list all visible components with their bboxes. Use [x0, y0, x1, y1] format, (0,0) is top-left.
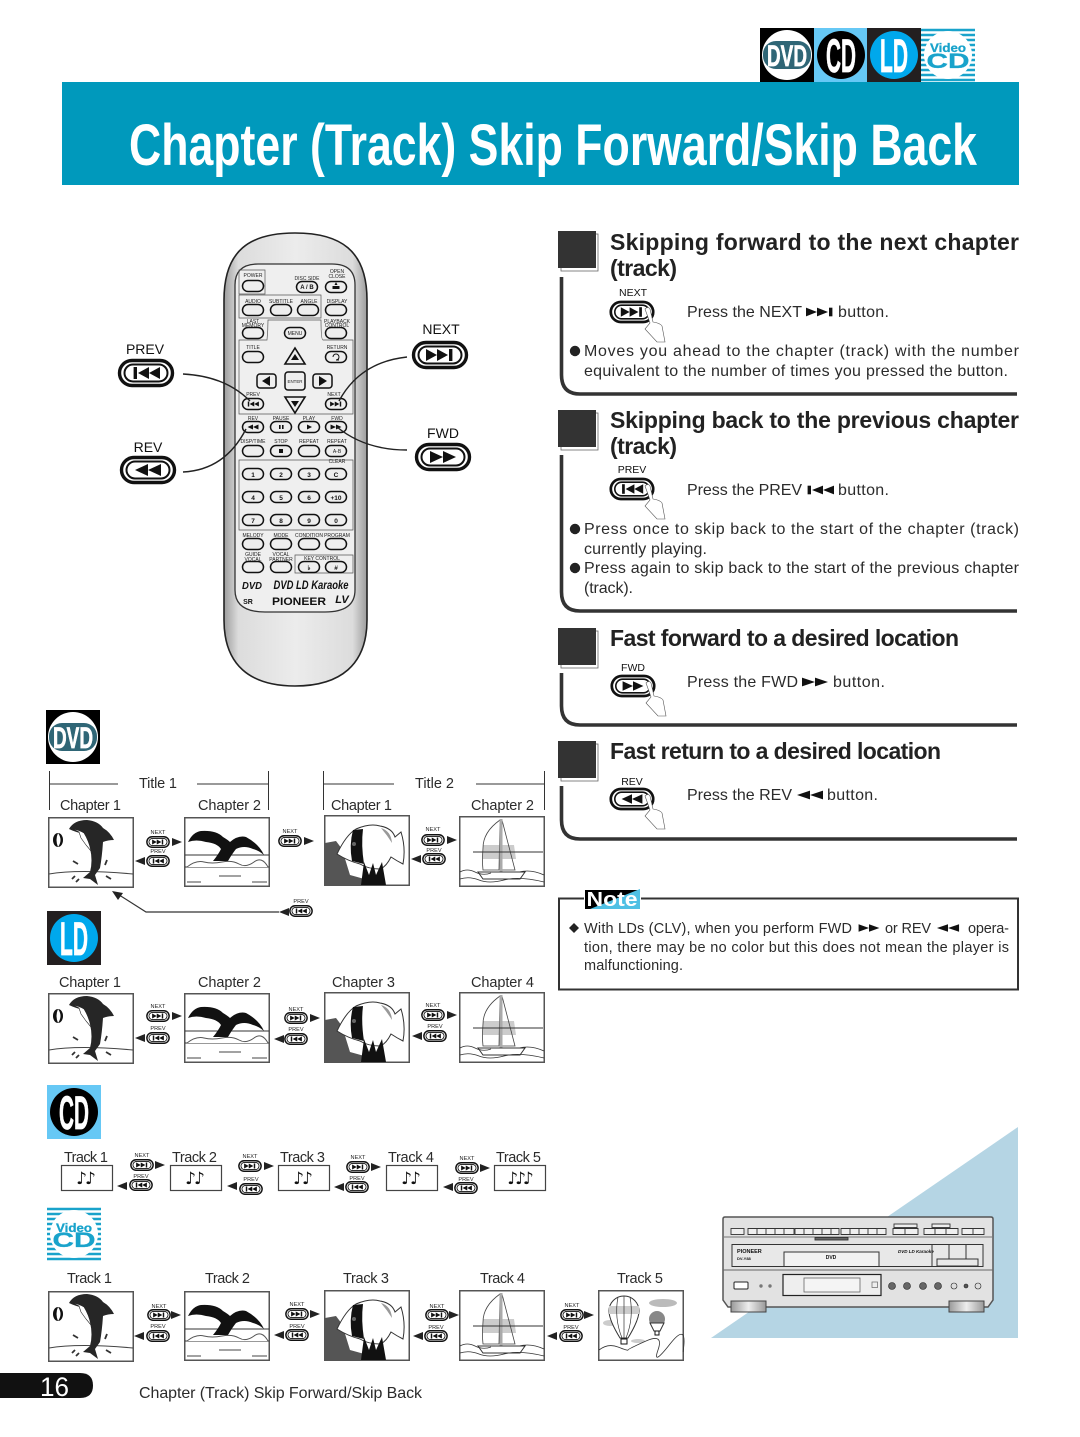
instruction	[687, 304, 889, 321]
remote labels: CONDITION	[295, 533, 323, 539]
labels	[60, 776, 534, 814]
labels: Track 1	[67, 1271, 112, 1287]
remote labels: STOP	[274, 439, 288, 445]
remote labels: VOCAL	[273, 552, 290, 558]
tray panel	[732, 1244, 983, 1266]
remote labels: 1	[251, 472, 255, 479]
skip buttons: NEXT	[430, 1304, 445, 1310]
skip buttons: PREV	[426, 848, 442, 854]
remote labels: FWD	[331, 416, 343, 422]
remote button glyphs	[248, 282, 341, 453]
section marker	[558, 741, 598, 781]
logo: LD: LD	[60, 912, 88, 965]
instruction	[687, 482, 889, 499]
skip buttons	[135, 1003, 457, 1044]
CD diagram	[47, 1085, 546, 1194]
remote labels: PREV	[246, 392, 260, 398]
skip buttons: PREV	[427, 1024, 443, 1030]
remote labels: NEXT	[327, 392, 341, 398]
remote labels: GUIDE	[245, 552, 262, 558]
skip buttons: NEXT	[151, 830, 166, 836]
skip buttons: PREV	[243, 1177, 259, 1183]
REV button with hand	[611, 776, 665, 829]
remote labels: ENTER	[288, 379, 302, 384]
logo: DVD	[46, 710, 100, 764]
remote labels: C	[334, 472, 339, 479]
skip buttons: NEXT	[152, 1304, 167, 1310]
labels: Track 3	[280, 1150, 325, 1166]
instruction: Press the REV	[687, 787, 792, 804]
remote labels: PLAYBACK	[324, 319, 351, 325]
instruction: button.	[827, 787, 878, 804]
section: fast return	[558, 738, 1017, 839]
callout: PREV button: PREV	[126, 341, 165, 357]
instruction: button.	[833, 674, 885, 691]
note badge: Note	[586, 889, 638, 911]
remote labels: MENU	[288, 331, 303, 337]
logo: CD	[47, 1085, 101, 1139]
skip buttons: PREV	[458, 1177, 474, 1183]
remote labels: OPEN	[330, 269, 344, 275]
remote labels: KEY CONTROL	[304, 556, 340, 562]
note text: opera-	[968, 921, 1009, 937]
remote labels: CLEAR	[329, 459, 346, 465]
music notes: ♪♪♪	[507, 1169, 533, 1189]
labels: Chapter 1	[60, 798, 121, 814]
heading: (track)	[610, 433, 677, 459]
remote labels: DVD LD Karaoke	[274, 578, 349, 592]
NEXT button with hand	[611, 287, 665, 342]
remote labels: ♭	[307, 564, 311, 572]
skip buttons: PREV	[150, 1324, 166, 1330]
skip buttons: PREV	[133, 1174, 149, 1180]
note text: malfunctioning.	[584, 958, 683, 974]
skip buttons: NEXT	[426, 827, 441, 833]
remote labels: 5	[279, 495, 283, 502]
title brackets	[49, 771, 544, 810]
callout: NEXT button: NEXT	[422, 321, 460, 337]
remote labels: PARTNER	[269, 557, 293, 563]
labels: Track 3	[343, 1271, 389, 1287]
heading: (track)	[610, 255, 677, 281]
section: fast forward	[558, 625, 1017, 725]
player branding: PIONEER	[737, 1249, 762, 1255]
skip buttons: NEXT	[290, 1302, 305, 1308]
logo: Video CD	[47, 1207, 101, 1261]
labels	[64, 1150, 541, 1166]
NEXT button with hand: NEXT	[619, 287, 648, 299]
bullet text	[570, 343, 1020, 380]
labels	[67, 1271, 663, 1287]
remote labels: ANGLE	[301, 299, 318, 305]
labels: Track 1	[64, 1150, 108, 1166]
remote labels: PAUSE	[273, 416, 290, 422]
logo: DVD: DVD	[767, 40, 807, 73]
skip buttons	[117, 1153, 490, 1194]
callout: FWD button: FWD	[427, 425, 459, 441]
heading: Fast forward to a desired location	[610, 625, 959, 651]
instruction: Press the NEXT	[687, 304, 802, 321]
labels: Track 2	[172, 1150, 217, 1166]
bullet text: Press again to skip back to the start of the previous chapter	[584, 560, 1020, 577]
note frame	[559, 898, 1018, 990]
remote labels: CONTROL	[325, 323, 349, 329]
labels: Chapter 1	[59, 975, 121, 991]
music notes: ♪♪	[293, 1169, 312, 1189]
remote labels: PROGRAM	[324, 533, 350, 539]
logo: DVD	[760, 28, 814, 82]
heading	[610, 229, 1019, 281]
skip buttons	[135, 827, 457, 866]
remote labels: 0	[334, 518, 338, 525]
logo: Video CD: Video	[56, 1223, 92, 1235]
note text: or REV	[885, 921, 931, 937]
logo: LD: LD	[880, 29, 908, 82]
remote button outlines	[239, 270, 353, 573]
section marker	[558, 231, 598, 271]
skip buttons: PREV	[289, 1324, 305, 1330]
remote labels: SUBTITLE	[269, 299, 294, 305]
skip buttons: PREV	[150, 1026, 166, 1032]
labels: Title 2	[415, 776, 454, 792]
return arrow	[112, 891, 312, 916]
remote labels: PIONEER	[272, 596, 326, 608]
bullet text: equivalent to the number of times you pressed the button.	[584, 363, 1008, 380]
blue triangle backdrop	[711, 1127, 1018, 1338]
return arrow: PREV	[293, 899, 309, 905]
skip buttons: NEXT	[460, 1156, 475, 1162]
instruction: Press the FWD	[687, 674, 798, 691]
skip buttons: NEXT	[426, 1003, 441, 1009]
remote labels: MELODY	[242, 533, 264, 539]
FWD button with hand	[612, 662, 666, 716]
remote labels: CLOSE	[329, 274, 346, 280]
logo: Video CD: Video	[930, 43, 966, 55]
labels: Title 1	[139, 776, 177, 792]
remote labels: DVD	[242, 581, 262, 592]
labels: Track 5	[496, 1150, 541, 1166]
skip buttons: NEXT	[351, 1155, 366, 1161]
title banner	[62, 82, 1019, 185]
labels: Track 4	[388, 1150, 434, 1166]
section rule	[562, 786, 1017, 839]
skip buttons: NEXT	[289, 1007, 304, 1013]
section rule	[562, 277, 1017, 394]
instruction: Press the PREV	[687, 482, 802, 499]
skip buttons: NEXT	[243, 1154, 258, 1160]
labels: Track 2	[205, 1271, 250, 1287]
PREV button with hand	[611, 464, 665, 519]
remote labels: A / B	[300, 285, 314, 291]
bullet text: Press once to skip back to the start of the chapter (track)	[584, 521, 1019, 538]
DVD diagram	[46, 710, 544, 916]
logo: DVD: DVD	[53, 722, 93, 755]
callout: PREV button	[120, 341, 172, 386]
skip buttons: NEXT	[151, 1004, 166, 1010]
skip buttons: NEXT	[135, 1153, 150, 1159]
instruction: button.	[838, 482, 889, 499]
Video CD diagram	[47, 1207, 684, 1361]
remote labels: DISC SIDE	[294, 276, 320, 282]
remote labels	[240, 269, 351, 608]
bullet text: currently playing.	[584, 541, 707, 558]
note text: With LDs (CLV), when you perform FWD	[584, 921, 852, 937]
callout: FWD button	[416, 425, 470, 470]
remote labels: 6	[307, 495, 311, 502]
labels: Chapter 4	[471, 975, 534, 991]
remote control	[224, 233, 367, 686]
labels	[59, 975, 534, 991]
logo: Video CD: CD	[52, 1229, 96, 1252]
remote labels: +10	[330, 495, 342, 502]
logo: Video CD: CD	[926, 50, 970, 73]
labels: Chapter 2	[198, 798, 261, 814]
top button strip	[723, 1224, 993, 1240]
remote labels: 7	[251, 518, 255, 525]
labels: Track 5	[617, 1271, 663, 1287]
remote labels: 8	[279, 518, 283, 525]
instruction	[687, 674, 885, 691]
FWD button with hand: FWD	[621, 662, 645, 674]
logo: LD	[867, 28, 921, 82]
section marker	[558, 628, 598, 668]
bullet text: Moves you ahead to the chapter (track) with the number	[584, 343, 1020, 360]
labels: Chapter 3	[332, 975, 395, 991]
player branding: DVD	[826, 1255, 837, 1261]
remote labels: A-B	[333, 449, 342, 455]
remote labels: POWER	[244, 273, 263, 279]
note text: tion, there may be no color but this does not mean the player is	[584, 940, 1009, 956]
skip buttons: NEXT	[283, 829, 298, 835]
remote labels: MODE	[274, 533, 289, 539]
remote labels: REPEAT	[299, 439, 319, 445]
PREV button with hand: PREV	[618, 464, 646, 476]
note text	[569, 921, 1009, 974]
remote labels: SR	[243, 599, 253, 606]
bullet text	[570, 521, 1020, 597]
callout: REV button: REV	[134, 439, 163, 455]
logo: CD: CD	[826, 29, 856, 82]
instruction: button.	[838, 304, 889, 321]
leader lines	[183, 357, 407, 472]
remote labels: AUDIO	[245, 299, 261, 305]
remote labels: #	[334, 565, 338, 572]
disc logos row	[760, 28, 975, 82]
LD diagram	[47, 911, 544, 1063]
remote labels: DISPLAY	[327, 299, 348, 305]
music notes: ♪♪	[401, 1169, 420, 1189]
section rule	[562, 673, 1017, 725]
skip buttons: PREV	[428, 1325, 444, 1331]
section marker	[558, 410, 598, 450]
player feet	[731, 1301, 984, 1312]
logo: Video CD	[921, 28, 975, 82]
heading: Fast return to a desired location	[610, 738, 941, 764]
note box	[559, 889, 1018, 990]
remote labels: VOCAL	[245, 557, 262, 563]
remote labels: DISP/TIME	[240, 439, 266, 445]
callout: NEXT button	[414, 321, 466, 368]
REV button with hand: REV	[621, 776, 643, 788]
skip buttons: PREV	[349, 1176, 365, 1182]
remote labels: TITLE	[246, 345, 260, 351]
remote labels: 4	[251, 495, 255, 502]
heading	[610, 407, 1019, 459]
callout: REV button	[122, 439, 174, 482]
music notes	[76, 1169, 533, 1189]
skip buttons: PREV	[288, 1027, 304, 1033]
section: skipping back	[558, 407, 1020, 611]
labels: Chapter 2	[471, 798, 534, 814]
player branding: DV-Y88	[737, 1256, 752, 1261]
remote labels: LV	[335, 594, 350, 606]
remote labels: REV	[248, 416, 259, 422]
instruction	[687, 787, 878, 804]
labels: Chapter 2	[198, 975, 261, 991]
remote labels: PLAY	[303, 416, 316, 422]
skip buttons: PREV	[150, 849, 166, 855]
logo: CD	[814, 28, 867, 82]
player branding: DVD LD Karaoke	[898, 1249, 934, 1254]
skip buttons	[134, 1302, 594, 1341]
remote labels: MEMORY	[242, 323, 265, 329]
remote labels: REPEAT	[327, 439, 347, 445]
lower control panel	[723, 1270, 993, 1296]
skip buttons: PREV	[563, 1325, 579, 1331]
music notes: ♪♪	[76, 1169, 95, 1189]
labels: Chapter 1	[331, 798, 392, 814]
track pictures	[49, 1291, 684, 1361]
section: skipping forward	[558, 229, 1020, 394]
remote labels: LAST	[247, 319, 259, 325]
remote buttons	[242, 280, 346, 572]
track boxes	[62, 1166, 546, 1190]
heading: Skipping back to the previous chapter	[610, 407, 1019, 433]
page number	[0, 1372, 93, 1402]
player branding	[737, 1249, 934, 1261]
chapter pictures	[49, 816, 544, 887]
logo: LD	[47, 911, 101, 965]
remote panel	[235, 264, 355, 612]
music notes: ♪♪	[185, 1169, 204, 1189]
heading: Skipping forward to the next chapter	[610, 229, 1019, 255]
remote body	[224, 233, 367, 686]
bullet text: (track).	[584, 580, 633, 597]
remote labels: RETURN	[327, 345, 348, 351]
remote labels: 9	[307, 518, 311, 525]
remote labels: 3	[307, 472, 311, 479]
skip buttons: NEXT	[565, 1303, 580, 1309]
footer title: Chapter (Track) Skip Forward/Skip Back	[139, 1385, 423, 1402]
player illustration	[723, 1217, 993, 1312]
labels: Track 4	[480, 1271, 525, 1287]
section rule	[562, 455, 1017, 611]
player body	[723, 1217, 993, 1307]
logo: CD: CD	[59, 1086, 89, 1139]
page number: 16	[40, 1372, 69, 1402]
chapter pictures	[49, 993, 544, 1063]
remote labels: 2	[279, 472, 283, 479]
